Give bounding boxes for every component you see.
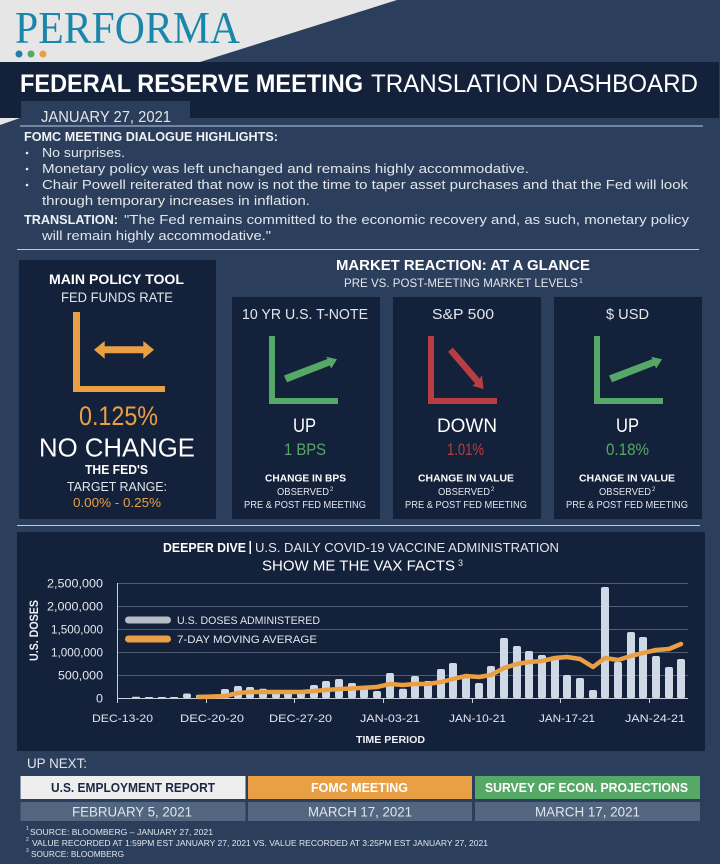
heading: deeper dive: DEEPER DIVE: [163, 540, 246, 555]
panel: S&P 500: CHANGE IN VALUE: [418, 474, 514, 484]
panel: S&P 500: 2: [491, 487, 495, 493]
text block: FOMC highlights: Chair Powell reiterated that now is not the time to taper asset purchases and that the Fed will look: [42, 178, 689, 192]
text block: translation: TRANSLATION:: [24, 213, 118, 227]
event: FOMC meeting: FOMC MEETING: [311, 781, 408, 795]
text block: FOMC highlights: No surprises.: [42, 146, 125, 160]
event: U.S. employment report: U.S. EMPLOYMENT REPORT: [51, 781, 215, 795]
y axis labels: 2,000,000: [47, 600, 103, 614]
x axis labels: DEC-13-20: [92, 713, 153, 725]
event: FOMC meeting: [248, 776, 472, 821]
y axis labels: 2,500,000: [47, 576, 103, 590]
date tab: [21, 101, 190, 126]
footnotes: VALUE RECORDED AT 1:59PM EST JANUARY 27, 2021 VS. VALUE RECORDED AT 3:25PM EST JANUARY 27, 2021: [32, 839, 489, 848]
event: survey of econ. projections: SURVEY OF ECON. PROJECTIONS: [485, 781, 688, 795]
panel: S&P 500: S&P 500: [432, 307, 494, 323]
text block: FOMC highlights: Monetary policy was left unchanged and remains highly accommodative.: [42, 162, 529, 176]
panel: main policy tool: FED FUNDS RATE: [61, 289, 173, 305]
title band: FEDERAL RESERVE MEETING: [20, 70, 363, 98]
heading: market reaction: MARKET REACTION: AT A GLANCE: [336, 258, 590, 274]
panel: S&P 500: PRE & POST FED MEETING: [405, 500, 527, 511]
panel: 10 yr U.S. T-note: 10 YR U.S. T-NOTE: [242, 307, 368, 323]
panel: main policy tool: MAIN POLICY TOOL: [49, 271, 184, 287]
panel: 10 yr U.S. T-note: PRE & POST FED MEETING: [244, 500, 366, 511]
heading: market reaction: PRE VS. POST-MEETING MARKET LEVELS: [344, 278, 578, 290]
heading: market reaction: [336, 258, 590, 290]
x axis labels: JAN-24-21: [625, 713, 685, 725]
x axis labels: DEC-20-20: [180, 713, 244, 725]
panel: 10 yr U.S. T-note: 1 BPS: [284, 440, 326, 459]
legend: U.S. DOSES ADMINISTERED: [177, 615, 320, 627]
panel: deeper dive chart: [17, 532, 705, 751]
logo: Performa: PERFORMA: [15, 3, 240, 53]
date tab: JANUARY 27, 2021: [41, 109, 171, 126]
panel: $ USD: $ USD: [606, 307, 649, 323]
y axis labels: 500,000: [58, 668, 103, 682]
text block: FOMC highlights: through temporary increases in inflation.: [42, 194, 310, 208]
icon: flat rate chart axes and arrow: [73, 312, 165, 392]
heading: deeper dive: 3: [458, 558, 463, 568]
panel: $ USD: CHANGE IN VALUE: [579, 474, 675, 484]
event: survey of econ. projections: [475, 776, 700, 821]
icon: up arrow chart: [594, 336, 663, 404]
x axis labels: JAN-17-21: [539, 713, 595, 725]
text block: translation: will remain highly accommodative.": [41, 229, 271, 243]
x axis labels: [92, 713, 685, 746]
panel: 10 yr U.S. T-note: 2: [330, 487, 334, 493]
x axis labels: DEC-27-20: [269, 713, 332, 725]
y axis labels: U.S. DOSES: [29, 600, 41, 661]
title band: TRANSLATION DASHBOARD: [371, 70, 698, 98]
chart grid and axes: [117, 583, 688, 703]
heading: deeper dive: [163, 540, 559, 574]
footnotes: [26, 826, 489, 859]
legend: 7-DAY MOVING AVERAGE: [177, 634, 317, 646]
y axis labels: 1,000,000: [51, 646, 103, 660]
footnotes: 1: [26, 826, 29, 832]
panel: $ USD: OBSERVED: [599, 487, 651, 498]
panel: main policy tool: 0.125%: [79, 401, 158, 431]
panel: $ USD: 2: [652, 487, 656, 493]
panel: 10 yr U.S. T-note: OBSERVED: [277, 487, 329, 498]
title band: [0, 62, 719, 118]
event: survey of econ. projections: MARCH 17, 2021: [535, 804, 640, 820]
panel: main policy tool: NO CHANGE: [39, 432, 195, 462]
event: U.S. employment report: [20, 776, 246, 821]
x axis labels: JAN-03-21: [360, 713, 420, 725]
panel: main policy tool: [19, 260, 216, 519]
heading: market reaction: 1: [579, 278, 583, 285]
header: light diagonal logo area: [0, 0, 397, 125]
panel: $ USD: PRE & POST FED MEETING: [566, 500, 688, 511]
footnotes: 2: [26, 837, 29, 843]
panel: main policy tool: THE FED'S: [85, 463, 148, 477]
panel: 10 yr U.S. T-note: UP: [293, 416, 316, 437]
panel: $ USD: 0.18%: [606, 440, 649, 459]
text block: translation: "The Fed remains committed to the economic recovery and, as such, monetary policy: [124, 213, 690, 227]
x axis labels: TIME PERIOD: [356, 735, 425, 746]
event: FOMC meeting: MARCH 17, 2021: [308, 804, 412, 820]
y axis labels: 1,500,000: [51, 622, 103, 636]
panel: S&P 500: [393, 297, 541, 519]
panel: $ USD: [554, 297, 702, 519]
x axis labels: JAN-10-21: [449, 713, 506, 725]
text block: translation: [24, 213, 690, 243]
footnotes: SOURCE: BLOOMBERG – JANUARY 27, 2021: [30, 828, 214, 837]
panel: 10 yr U.S. T-note: [232, 297, 380, 519]
y axis labels: 0: [96, 692, 103, 706]
panel: S&P 500: DOWN: [437, 416, 497, 437]
bars: U.S. doses administered: [132, 587, 685, 698]
heading: up next: UP NEXT:: [27, 755, 87, 771]
y axis labels: [29, 576, 103, 706]
legend: [125, 615, 320, 646]
footnotes: 3: [26, 848, 29, 854]
icon: up arrow chart: [269, 336, 338, 404]
panel: S&P 500: OBSERVED: [438, 487, 490, 498]
icon: down arrow chart: [428, 336, 497, 404]
heading: deeper dive: SHOW ME THE VAX FACTS: [262, 558, 455, 574]
text block: FOMC highlights: FOMC MEETING DIALOGUE HIGHLIGHTS:: [24, 130, 278, 144]
panel: main policy tool: TARGET RANGE:: [67, 479, 167, 494]
event: U.S. employment report: FEBRUARY 5, 2021: [72, 804, 192, 820]
panel: main policy tool: 0.00% - 0.25%: [73, 495, 161, 510]
panel: $ USD: UP: [616, 416, 639, 437]
heading: deeper dive: U.S. DAILY COVID-19 VACCINE ADMINISTRATION: [255, 540, 559, 555]
panel: S&P 500: 1.01%: [447, 440, 484, 459]
footnotes: SOURCE: BLOOMBERG: [31, 850, 124, 859]
panel: 10 yr U.S. T-note: CHANGE IN BPS: [265, 474, 346, 484]
text block: FOMC highlights: [24, 130, 689, 208]
line: 7-day moving average: [199, 644, 681, 697]
